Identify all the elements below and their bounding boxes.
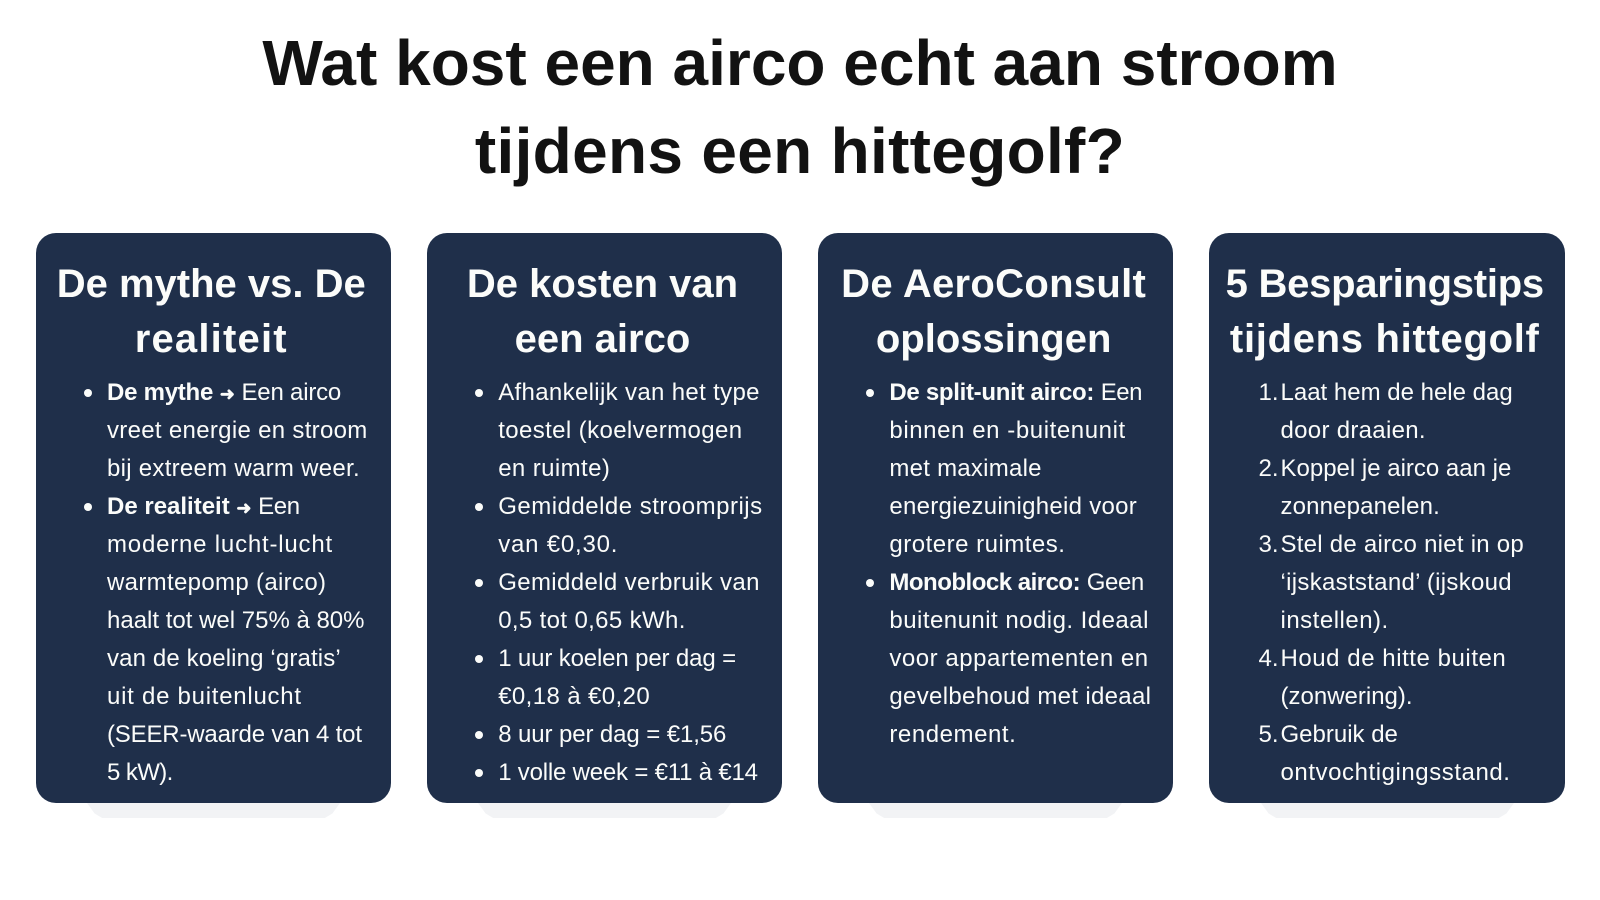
list: tips: ontvochtigingsstand.	[1280, 758, 1511, 786]
list: kosten: Afhankelijk van het type	[498, 378, 760, 406]
heading: kosten	[467, 262, 738, 361]
panel shadow: kosten	[478, 803, 731, 818]
list: tips: zonnepanelen.	[1280, 492, 1440, 520]
list: mythe en realiteit: bij extreem warm weer.	[107, 454, 360, 482]
list: mythe en realiteit: haalt tot wel 75% à 80%	[107, 606, 364, 634]
list: kosten: 1 volle week = €11 à €14	[498, 758, 758, 786]
list: oplossingen: rendement.	[889, 720, 1016, 748]
panel: de kosten van een airco	[427, 233, 782, 803]
panel: de aeroconsult oplossingen	[818, 233, 1173, 803]
panel: 5 besparingstips: 3.	[1258, 530, 1278, 558]
list: mythe en realiteit: 5 kW).	[107, 758, 173, 786]
title: Wat kost een airco echt aan stroom	[262, 27, 1338, 99]
list: oplossingen: De split-unit airco: Een	[889, 378, 1142, 406]
heading: tips: tijdens hittegolf	[1230, 317, 1540, 361]
list: oplossingen: Monoblock airco: Geen	[889, 568, 1144, 596]
list: mythe en realiteit: van de koeling ‘gratis’	[107, 644, 341, 672]
heading: kosten: De kosten van	[467, 262, 738, 306]
list: kosten: van €0,30.	[498, 530, 618, 558]
list: tips: Gebruik de	[1280, 720, 1398, 748]
list: mythe en realiteit: vreet energie en stroom	[107, 416, 368, 444]
list: oplossingen: energiezuinigheid voor	[889, 492, 1137, 520]
list: kosten: €0,18 à €0,20	[498, 682, 650, 710]
list: kosten: 1 uur koelen per dag =	[498, 644, 736, 672]
list: tips: Houd de hitte buiten	[1280, 644, 1506, 672]
panel: 5 besparingstips: 1.	[1258, 378, 1278, 406]
panel: 5 besparingstips	[1209, 233, 1564, 803]
list: tips: door draaien.	[1280, 416, 1426, 444]
heading: kosten: een airco	[515, 317, 690, 361]
heading: oplossingen	[841, 262, 1146, 361]
heading: oplossingen: oplossingen	[876, 317, 1111, 361]
list: kosten: toestel (koelvermogen	[498, 416, 742, 444]
list: tips: instellen).	[1280, 606, 1389, 634]
list: tips: Laat hem de hele dag	[1280, 378, 1513, 406]
list: kosten: Gemiddeld verbruik van	[498, 568, 760, 596]
list: kosten: 8 uur per dag = €1,56	[498, 720, 726, 748]
list: kosten: Gemiddelde stroomprijs	[498, 492, 763, 520]
panel shadow: mythe	[87, 803, 340, 818]
list: kosten	[475, 378, 763, 786]
list: tips: Koppel je airco aan je	[1280, 454, 1511, 482]
list: tips: ‘ijskaststand’ (ijskoud	[1280, 568, 1512, 596]
list: mythe en realiteit: De mythe ➜ Een airco	[107, 378, 341, 406]
list: oplossingen: met maximale	[889, 454, 1042, 482]
panel shadow: tips	[1261, 803, 1514, 818]
list: mythe en realiteit: (SEER-waarde van 4 tot	[107, 720, 362, 748]
heading: oplossingen: De AeroConsult	[841, 262, 1146, 306]
list: mythe en realiteit: De realiteit ➜ Een	[107, 492, 300, 520]
list: mythe en realiteit: moderne lucht-lucht	[107, 530, 333, 558]
list: tips: Stel de airco niet in op	[1280, 530, 1524, 558]
heading: tips	[1226, 262, 1544, 361]
title	[262, 27, 1338, 187]
list: kosten: 0,5 tot 0,65 kWh.	[498, 606, 686, 634]
list: mythe en realiteit: uit de buitenlucht	[107, 682, 302, 710]
panel: 5 besparingstips: 2.	[1258, 454, 1278, 482]
list: mythe en realiteit	[84, 378, 368, 786]
list: oplossingen: gevelbehoud met ideaal	[889, 682, 1151, 710]
list: mythe en realiteit: warmtepomp (airco)	[107, 568, 326, 596]
panel: 5 besparingstips: 5.	[1258, 720, 1278, 748]
list: tips	[1258, 378, 1524, 786]
heading: mythe	[57, 262, 366, 361]
title: tijdens een hittegolf?	[475, 115, 1125, 187]
heading: mythe: De mythe vs. De	[57, 262, 366, 306]
list: oplossingen: voor appartementen en	[889, 644, 1149, 672]
panel: de mythe vs de realiteit	[36, 233, 391, 803]
panel shadow: oplossingen	[869, 803, 1122, 818]
list: oplossingen: binnen en -buitenunit	[889, 416, 1126, 444]
heading: tips: 5 Besparingstips	[1226, 262, 1544, 306]
list: tips: (zonwering).	[1280, 682, 1413, 710]
panel: 5 besparingstips: 4.	[1258, 644, 1278, 672]
heading: mythe: realiteit	[135, 317, 288, 361]
list: kosten: en ruimte)	[498, 454, 610, 482]
list: oplossingen: grotere ruimtes.	[889, 530, 1065, 558]
list: oplossingen	[866, 378, 1151, 748]
list: oplossingen: buitenunit nodig. Ideaal	[889, 606, 1149, 634]
